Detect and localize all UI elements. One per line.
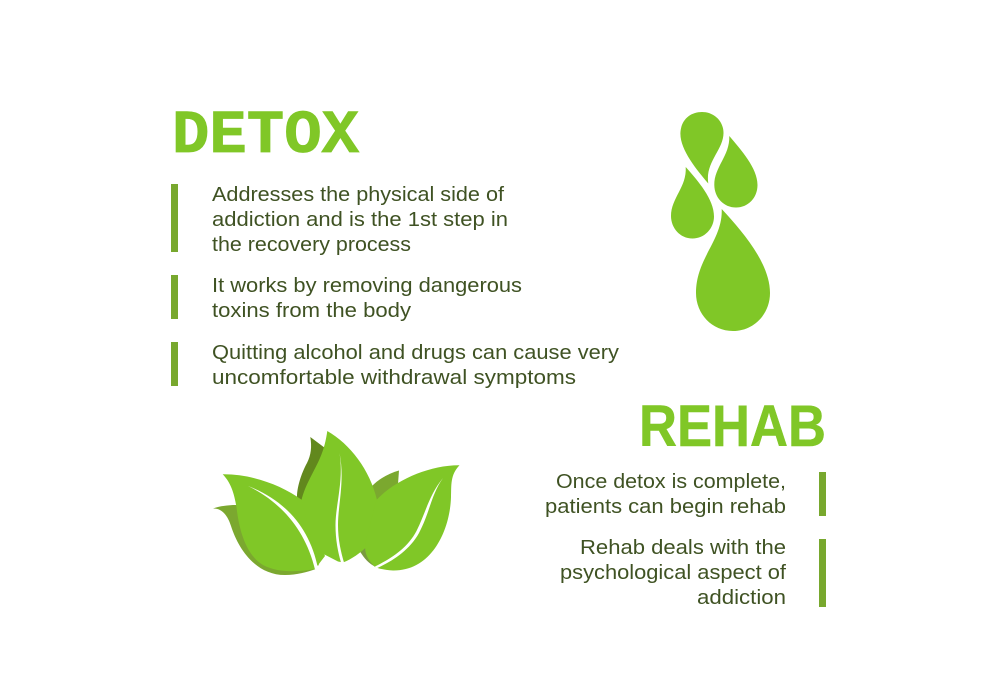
detox point 1: [171, 183, 508, 256]
detox point 1: addiction and is the 1st step in: [212, 208, 508, 231]
rehab point 1: patients can begin rehab: [545, 495, 786, 518]
rehab point 2: addiction: [697, 586, 786, 609]
detox point 3: Quitting alcohol and drugs can cause very: [212, 341, 620, 364]
back leaf dark centre: [297, 437, 325, 501]
title: DETOX: DETOX: [172, 102, 359, 171]
icon: water drops: [671, 112, 770, 331]
detox point 3: [171, 341, 620, 389]
right leaf vein: [375, 478, 443, 568]
left leaf: [223, 474, 325, 571]
panel: detox points: [171, 183, 620, 389]
icon: leaves: [213, 431, 460, 575]
detox point 1: the recovery process: [212, 233, 411, 256]
rehab point 2: [560, 536, 826, 609]
back leaf shade right: [372, 470, 399, 505]
panel: rehab points: [545, 470, 826, 609]
back leaf shade left: [213, 500, 316, 575]
detox point 1: Addresses the physical side of: [212, 183, 504, 206]
centre leaf: [302, 431, 377, 566]
centre leaf vein: [336, 453, 344, 562]
detox point 2: It works by removing dangerous: [212, 274, 522, 297]
rehab point 2: psychological aspect of: [560, 561, 786, 584]
left leaf vein: [248, 486, 318, 570]
detox point 2: [171, 274, 522, 322]
rehab point 2: Rehab deals with the: [580, 536, 786, 559]
rehab point 1: Once detox is complete,: [556, 470, 786, 493]
right leaf: [365, 465, 460, 571]
rehab point 1: [545, 470, 826, 518]
title: REHAB: REHAB: [639, 394, 826, 459]
detox point 3: uncomfortable withdrawal symptoms: [212, 366, 576, 389]
detox point 2: toxins from the body: [212, 299, 412, 322]
